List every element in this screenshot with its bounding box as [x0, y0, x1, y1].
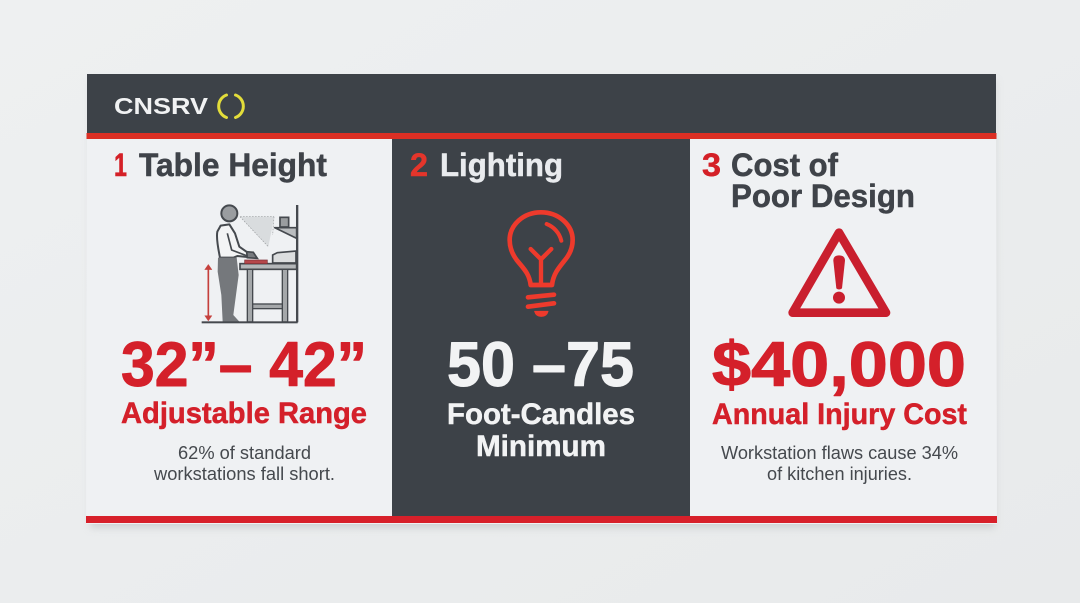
stat: 32 to 42 inches: 32”– 42”: [121, 330, 367, 400]
stat: 50 to 75: 50 –75: [447, 330, 634, 400]
icon: standing worker at table: [202, 205, 298, 323]
note: kitchen injuries: [721, 442, 958, 484]
label: foot-candles minimum: Minimum: [476, 430, 606, 463]
panel: lighting background: [392, 139, 690, 517]
heading: lighting: 2: [410, 147, 428, 183]
header bar: [87, 74, 996, 133]
label: annual injury cost: Annual Injury Cost: [712, 398, 967, 431]
note: workstations fall short: [153, 442, 335, 484]
label: foot-candles minimum: Foot-Candles: [447, 398, 635, 431]
icon: warning triangle: [793, 233, 886, 313]
icon: light bulb: [510, 212, 573, 316]
panel: cost of poor design: [702, 147, 967, 484]
heading: lighting: Lighting: [440, 147, 563, 183]
logo icon: yellow ring: [219, 95, 243, 118]
note: kitchen injuries: of kitchen injuries.: [767, 463, 912, 484]
heading: table height: 1: [114, 147, 127, 183]
note: kitchen injuries: Workstation flaws cause 34%: [721, 442, 958, 463]
heading: cost of poor design: Poor Design: [731, 178, 915, 214]
panel: lighting: [410, 147, 635, 463]
panel: table height: [114, 147, 367, 484]
note: workstations fall short: 62% of standard: [178, 442, 311, 463]
heading: cost of poor design: [702, 147, 915, 214]
label: foot-candles minimum: [447, 398, 635, 463]
stat: forty thousand dollars: $40,000: [712, 330, 966, 400]
logo wordmark: CNSRV: [114, 93, 209, 119]
infographic card: [86, 74, 997, 524]
note: workstations fall short: workstations fall short.: [153, 463, 335, 484]
heading: cost of poor design: Cost of: [731, 147, 838, 183]
heading: table height: Table Height: [139, 147, 327, 183]
label: adjustable range: Adjustable Range: [121, 397, 367, 430]
heading: cost of poor design: 3: [702, 147, 721, 183]
